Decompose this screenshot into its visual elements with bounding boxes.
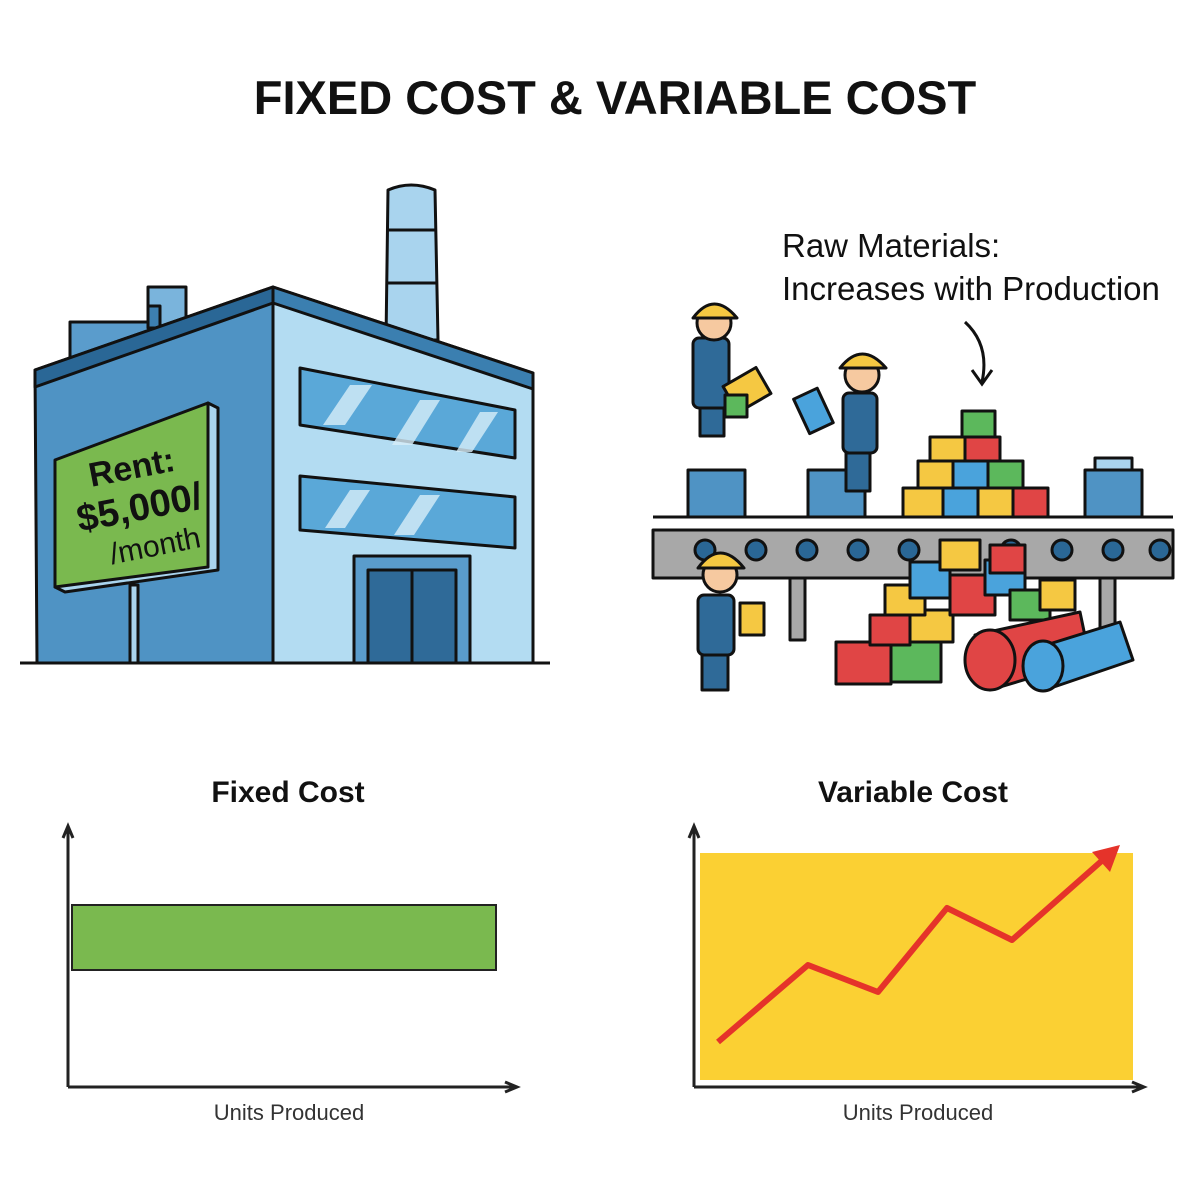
arrow: callout (965, 322, 992, 384)
door (354, 556, 470, 663)
callout: raw materials: Raw Materials: (782, 227, 1000, 264)
fill area (700, 853, 1133, 1080)
sign text: $5,000/ (73, 475, 206, 541)
building right face (273, 287, 533, 663)
heading: Variable Cost (818, 776, 1008, 809)
bins (688, 458, 1142, 517)
axis label: Units Produced (843, 1100, 993, 1125)
icon: chimney (386, 185, 438, 340)
sign text (66, 437, 213, 576)
worker 3 (698, 553, 764, 690)
callout: raw materials: Increases with Production (782, 270, 1160, 307)
conveyor (653, 517, 1173, 640)
sign text: Rent: (86, 441, 178, 495)
illustration: production line (653, 304, 1173, 691)
chart: variable cost (689, 776, 1144, 1125)
chart: fixed cost (63, 776, 517, 1125)
axes (63, 826, 517, 1092)
sign (55, 403, 218, 663)
heading: Fixed Cost (211, 776, 365, 809)
windows (300, 368, 515, 548)
title: FIXED COST & VARIABLE COST (254, 71, 977, 124)
building left face (35, 287, 273, 663)
worker 1 (693, 304, 771, 436)
bar (72, 905, 496, 970)
block pyramid (903, 411, 1048, 517)
block pile (836, 540, 1133, 691)
callout: raw materials (782, 227, 1160, 307)
trend line (718, 858, 1105, 1042)
axis label: Units Produced (214, 1100, 364, 1125)
axes (689, 826, 1144, 1092)
sign text: /month (107, 521, 203, 571)
rooftop unit (70, 287, 186, 362)
worker 2 (794, 354, 886, 491)
illustration: factory (20, 185, 550, 663)
